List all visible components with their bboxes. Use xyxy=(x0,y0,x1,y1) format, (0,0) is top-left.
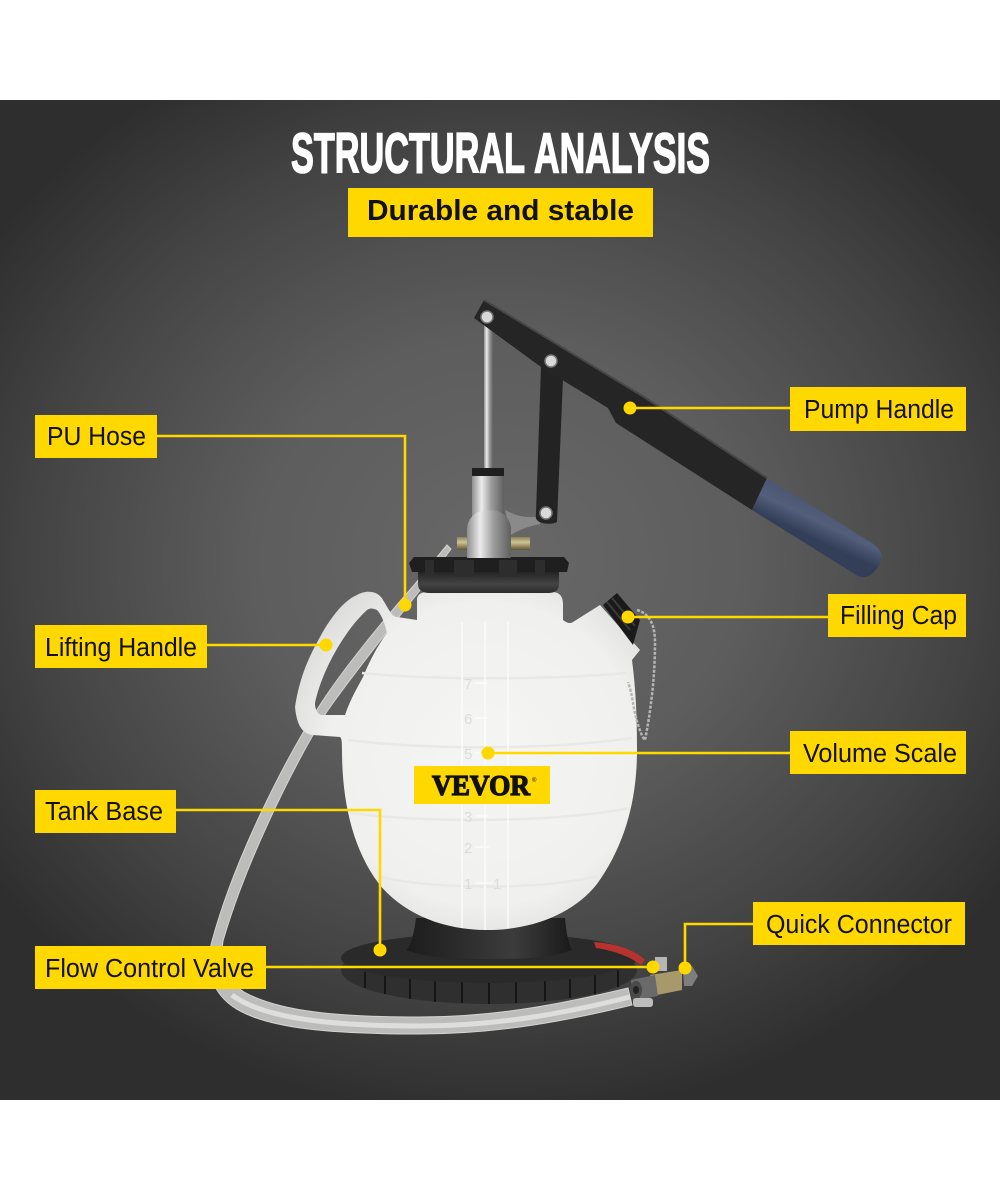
pump rod xyxy=(484,315,493,468)
callout: PU Hose: PU Hose xyxy=(47,423,146,451)
callout: PU Hose xyxy=(35,415,412,612)
volume scale: 1 xyxy=(493,876,501,893)
callout: Flow Control Valve: Flow Control Valve xyxy=(45,955,254,983)
lever link xyxy=(536,367,563,524)
volume scale: 7 xyxy=(464,676,472,693)
volume scale: 6 xyxy=(464,711,472,728)
tank body with lifting handle xyxy=(295,592,640,930)
callout: Tank Base: Tank Base xyxy=(45,798,163,826)
title: STRUCTURAL xyxy=(291,122,525,186)
volume scale: 3 xyxy=(464,809,472,826)
volume scale: 5 xyxy=(464,746,472,763)
tank ribs xyxy=(348,673,632,887)
volume scale: 2 xyxy=(464,840,472,857)
title: ANALYSIS xyxy=(534,122,710,186)
volume scale: 1 xyxy=(464,876,472,893)
callout: Tank Base xyxy=(35,790,386,956)
callout: Lifting Handle: Lifting Handle xyxy=(45,634,197,662)
VEVOR logo badge xyxy=(414,766,550,804)
volume scale xyxy=(462,622,508,930)
callout: Pump Handle: Pump Handle xyxy=(804,396,954,424)
pump handle lever xyxy=(474,300,767,510)
callout: Quick Connector xyxy=(678,902,965,974)
callout: Quick Connector: Quick Connector xyxy=(766,911,952,939)
callout: Filling Cap xyxy=(622,594,966,637)
VEVOR logo badge: ® xyxy=(532,777,537,784)
chain xyxy=(628,610,655,740)
filling cap xyxy=(603,593,640,645)
quick connector and valve xyxy=(630,957,698,1007)
tank base disc xyxy=(341,933,637,1004)
callout: Lifting Handle xyxy=(35,625,332,668)
subtitle banner: Durable and stable xyxy=(367,195,634,227)
pump cylinder xyxy=(467,468,540,558)
VEVOR logo badge: VEVOR xyxy=(432,770,531,802)
callout: Volume Scale xyxy=(482,731,966,774)
pump handle grip xyxy=(752,478,882,577)
callout: Flow Control Valve xyxy=(35,946,660,989)
callout: Pump Handle xyxy=(624,387,966,431)
brass fittings xyxy=(457,537,530,550)
PU hose xyxy=(209,545,632,1034)
callout: Volume Scale: Volume Scale xyxy=(803,740,957,768)
neck collar xyxy=(418,570,559,593)
product: oil extractor pump xyxy=(209,300,882,1034)
callout: Filling Cap: Filling Cap xyxy=(840,602,957,630)
subtitle banner xyxy=(348,188,653,237)
bolts xyxy=(481,311,557,519)
red valve lever xyxy=(594,942,645,965)
tank base cone xyxy=(406,918,572,959)
lid flange xyxy=(409,557,569,577)
